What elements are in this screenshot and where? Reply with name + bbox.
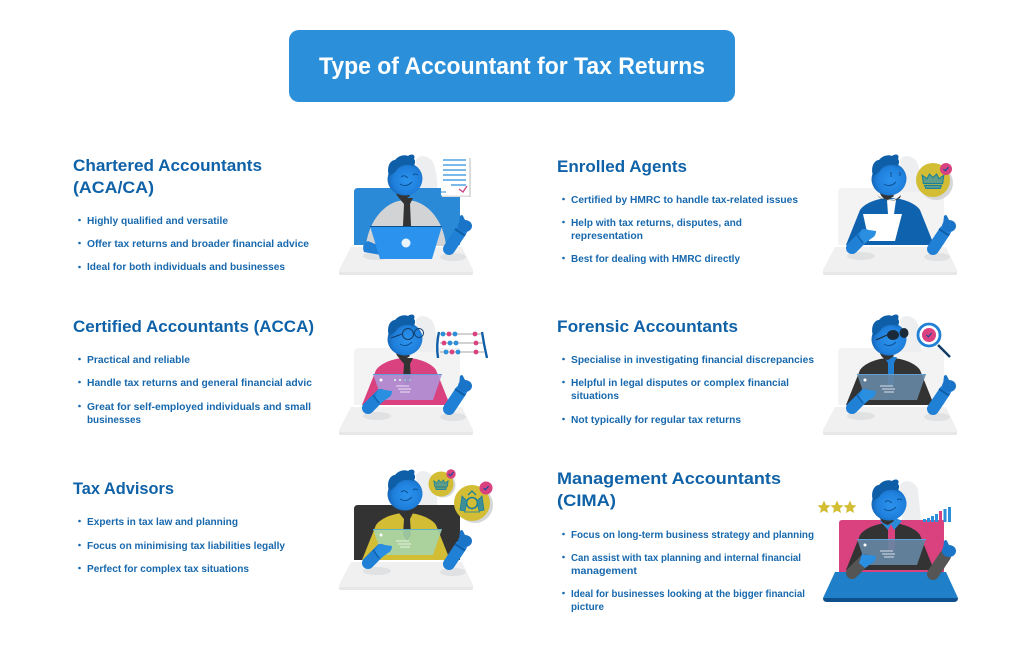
bullet list: picture xyxy=(571,601,604,613)
bullet list xyxy=(562,529,814,613)
bullet list xyxy=(562,194,798,265)
bullet list: Focus on minimising tax liabilities legally xyxy=(87,540,285,552)
heading: Chartered Accountants: (ACA/CA) xyxy=(73,178,154,197)
illustration: accountant with crown and coat of arms xyxy=(339,469,493,590)
bullet list: representation xyxy=(571,230,643,242)
icon: three stars xyxy=(818,500,856,513)
icon: tablet xyxy=(373,374,442,400)
icon: abacus xyxy=(437,332,487,358)
title banner xyxy=(289,30,735,102)
heading: Chartered Accountants: Chartered Accountants xyxy=(73,156,262,175)
title: Type of Accountant for Tax Returns xyxy=(319,53,705,80)
panel: Certified Accountants xyxy=(73,315,487,435)
icon: coat of arms badge xyxy=(454,482,493,523)
heading: Enrolled Agents: Enrolled Agents xyxy=(557,157,687,176)
bullet list: Practical and reliable xyxy=(87,354,190,366)
icon: crown badge xyxy=(428,469,456,498)
desk xyxy=(823,572,958,602)
panel: Management Accountants xyxy=(557,469,958,613)
bullet list: management xyxy=(571,565,638,577)
bullet list: Highly qualified and versatile xyxy=(87,215,228,227)
bullet list: Offer tax returns and broader financial advice xyxy=(87,238,309,250)
bullet list: Not typically for regular tax returns xyxy=(571,414,741,426)
illustration: agent with paper and crown badge xyxy=(823,155,957,275)
bullet list xyxy=(78,354,312,426)
heading: Forensic Accountants: Forensic Accountants xyxy=(557,317,738,336)
bullet list xyxy=(78,516,285,575)
icon: sunglasses xyxy=(876,328,908,340)
icon: growth bars xyxy=(923,507,951,522)
illustration: accountant with laptop and document xyxy=(339,155,473,275)
face: open eyes xyxy=(884,172,900,186)
icon: crown badge xyxy=(916,163,953,200)
bullet list: Ideal for businesses looking at the bigger financial xyxy=(571,588,805,600)
illustration: accountant with stars and growth chart xyxy=(818,480,958,602)
bullet list: Great for self-employed individuals and small xyxy=(87,401,311,413)
bullet list: Focus on long-term business strategy and planning xyxy=(571,529,814,541)
bullet list xyxy=(562,354,814,426)
icon: signed document xyxy=(441,157,471,197)
icon: tablet xyxy=(857,374,926,400)
icon: paper sheet xyxy=(863,214,902,241)
bullet list: Specialise in investigating financial discrepancies xyxy=(571,354,814,366)
icon: glasses xyxy=(391,328,424,340)
bullet list: Ideal for both individuals and businesses xyxy=(87,261,285,273)
bullet list: Can assist with tax planning and internal financial xyxy=(571,552,801,564)
icon: magnifying glass xyxy=(918,324,950,357)
bullet list: Helpful in legal disputes or complex financial xyxy=(571,377,789,389)
bullet list: Perfect for complex tax situations xyxy=(87,563,249,575)
bullet list: Certified by HMRC to handle tax-related issues xyxy=(571,194,798,206)
panel: Chartered Accountants xyxy=(73,155,473,275)
heading: Certified Accountants (ACCA): Certified Accountants (ACCA) xyxy=(73,317,314,336)
icon: tablet xyxy=(373,529,442,555)
panel: Enrolled Agents xyxy=(557,155,957,275)
bullet list xyxy=(78,215,309,273)
illustration: accountant with glasses and abacus xyxy=(339,315,487,435)
heading: Management Accountants: (CIMA) xyxy=(557,491,616,510)
bullet list: situations xyxy=(571,390,619,402)
bullet list: Help with tax returns, disputes, and xyxy=(571,217,742,229)
bullet list: Handle tax returns and general financial advic xyxy=(87,377,312,389)
heading: Management Accountants: Management Accountants xyxy=(557,469,781,488)
bullet list: businesses xyxy=(87,414,141,426)
bullet list: Experts in tax law and planning xyxy=(87,516,238,528)
illustration: accountant with sunglasses and magnifier xyxy=(823,315,957,435)
icon: tablet xyxy=(857,539,926,565)
icon: laptop xyxy=(370,226,442,259)
bullet list: Best for dealing with HMRC directly xyxy=(571,253,740,265)
heading: Tax Advisors: Tax Advisors xyxy=(73,479,174,498)
panel: Forensic Accountants xyxy=(557,315,957,435)
panel: Tax Advisors xyxy=(73,469,493,590)
